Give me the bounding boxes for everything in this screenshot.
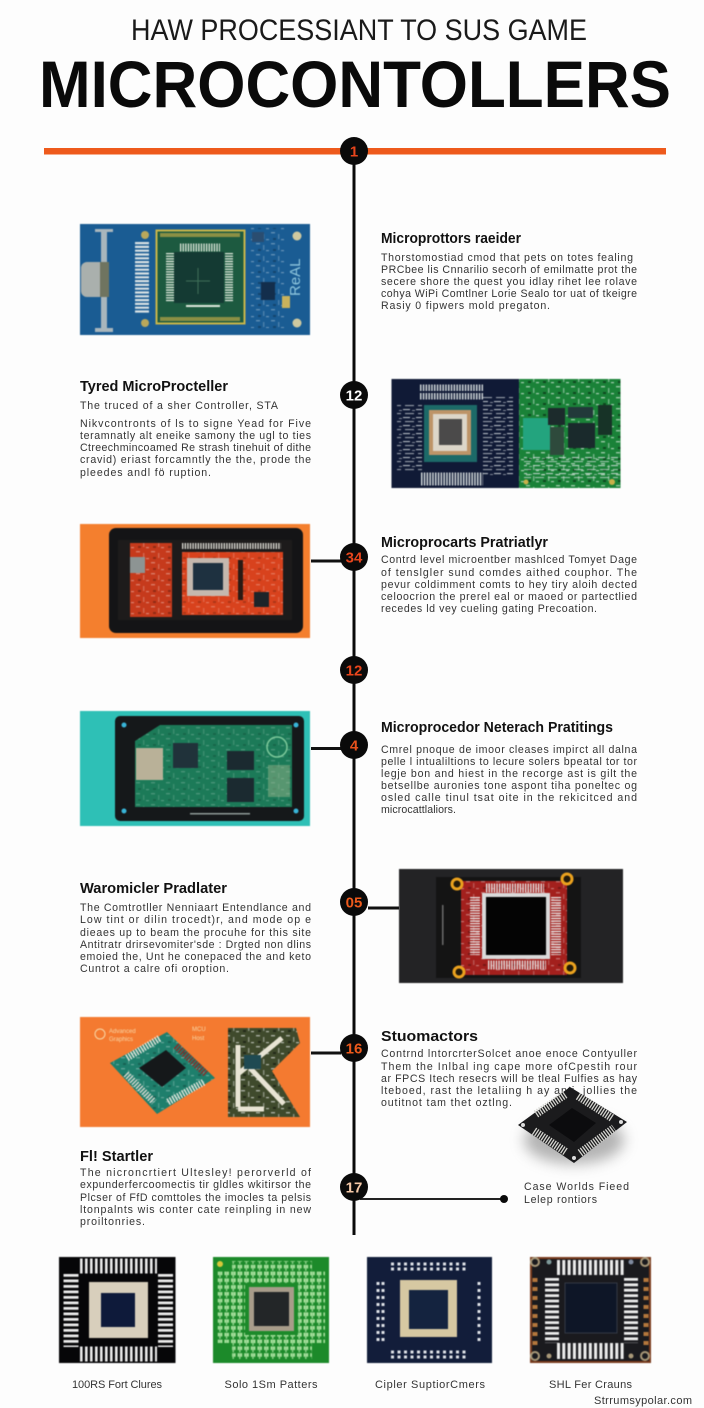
body text: expunderfercoomectis tir gldles wkitirsor the [80, 1179, 311, 1191]
callout label: Case Worlds Fieed [524, 1181, 629, 1193]
photo: rotated chip and K board on orange [80, 1017, 310, 1127]
marker 05: 05 [346, 894, 362, 912]
connector [311, 747, 341, 750]
body text: outitnot tam thet oztlng. [381, 1097, 512, 1109]
body text: celoocrion the prerel eal or maoed or partectlied [381, 591, 637, 603]
chip gallery [59, 1257, 651, 1391]
body text: Them the Inlbal ing cape more ofCpestih rour [381, 1061, 637, 1073]
body text [381, 1048, 638, 1109]
body text: cravid) eriast forcamntly the the, prode the [80, 454, 311, 466]
small photo labels [95, 1027, 206, 1043]
body text: Nikvcontronts of ls to signe Yead for Five [80, 418, 311, 430]
body text: Thorstomostiad cmod that pets on totes fealing [381, 252, 633, 264]
icon: floating black chip [518, 1087, 627, 1164]
marker 1 [340, 137, 368, 165]
body text: pelle l intualiltions to lecure solers bpeatal tor tor [381, 756, 637, 768]
chip 1: black package [59, 1257, 176, 1363]
marker 12 red [340, 656, 368, 684]
small photo labels: MCU [192, 1027, 206, 1033]
subtitle: HAW PROCESSIANT TO SUS GAME [131, 14, 587, 47]
body text [80, 418, 311, 479]
body text [80, 902, 311, 975]
heading: Stuomactors [381, 1029, 478, 1045]
marker 05 [340, 888, 368, 916]
small photo labels: Host [192, 1036, 205, 1042]
marker 12 red: 12 [346, 662, 362, 680]
marker 34: 34 [346, 550, 363, 566]
marker 34 [340, 543, 368, 571]
chip 3: navy package [367, 1257, 492, 1363]
chip captions: Cipler SuptiorCmers [375, 1379, 486, 1391]
body text: dieaes up to beam the procuhe for this site [80, 927, 311, 939]
connector with end dot [360, 1195, 508, 1203]
body text: ar FPCS Itech resecrs will be tleal Fulfies as hay [381, 1073, 638, 1085]
marker 12: 12 [346, 388, 362, 404]
marker 17 [340, 1173, 368, 1201]
body text: The Comtrotller Nenniaart Entendlance and [80, 902, 311, 914]
source credit: Strrumsypolar.com [594, 1395, 692, 1407]
heading: Fl! Startler [80, 1149, 153, 1165]
body text [80, 1167, 311, 1228]
chip captions [72, 1379, 632, 1391]
body text: Cmrel pnoque de imoor cleases impirct all dalna [381, 744, 637, 756]
body text: Cuntrot a calre ofi oroption. [80, 963, 229, 975]
photo: blue board [80, 224, 310, 335]
heading: Tyred MicroProcteller [80, 379, 228, 395]
marker 16: 16 [346, 1040, 362, 1058]
marker 4: 4 [350, 738, 359, 754]
body text: Contrnd lntorcrterSolcet anoe enoce Contyuller [381, 1048, 637, 1060]
body text: emoied the, Unt he conepaced the and keto [80, 951, 311, 963]
connector [311, 1052, 341, 1054]
body text: pevur coldimment comts to hey tiry aloih dected [381, 579, 637, 591]
body text: recedes ld vey cueling gating Precoation. [381, 603, 597, 615]
body text: PRCbee lis Cnnarilio secorh of emilmatte prot the [381, 264, 637, 276]
body text: Plcser of FfD comttoles the imocles ta pelsis [80, 1192, 311, 1204]
panel: step 4 [80, 711, 637, 826]
photo: dark and green boards [392, 379, 620, 488]
timeline spine [352, 151, 356, 1235]
title [39, 14, 671, 121]
orange divider [44, 148, 666, 154]
body text: of tenslgler sund comdes aithed couphor. The [381, 567, 637, 579]
heading: Microprocedor Neterach Pratitings [381, 720, 613, 736]
body text: microcattlaliors. [381, 804, 456, 816]
panel: step 3 [80, 524, 637, 638]
connector [311, 560, 341, 562]
marker 17: 17 [346, 1180, 362, 1196]
body text: secere shore the quest you idlay rihet lee rolave [381, 276, 637, 288]
body text: legje bon and hiest in the recorge ast is gilt the [381, 768, 637, 780]
photo: green board on teal [80, 711, 310, 826]
body text [381, 252, 637, 312]
body text: Contrd level microentber mashlced Tomyet Dage [381, 554, 637, 566]
chip captions: 100RS Fort Clures [72, 1379, 162, 1391]
photo: orange board in black case [80, 524, 310, 638]
body text: Ctreechmincoamed Re strash tinehuit of dithe [80, 442, 311, 454]
body text: pleedes andl fö ruption. [80, 467, 211, 479]
chip 4: brown edge package [530, 1257, 651, 1363]
main heading: MICROCONTOLLERS [39, 47, 671, 121]
panel: step 2 [80, 379, 620, 488]
connector [368, 906, 399, 910]
small photo labels: Advanced [109, 1029, 136, 1035]
heading: Microprottors raeider [381, 231, 521, 247]
photo: red board on dark case [399, 869, 623, 983]
panel: step 5 [80, 869, 623, 983]
heading: Waromicler Pradlater [80, 881, 227, 897]
subheading: The truced of a sher Controller, STA [80, 400, 279, 412]
panel: step 6 [80, 1017, 638, 1164]
body text: betsellbe auronies tone aspont tiha poneltec og [381, 780, 637, 792]
body text: lteboed, rast the letaliing h ay anti, jollies the [381, 1085, 637, 1097]
marker 12 [340, 381, 368, 409]
body text: Rasiy 0 fipwers mold pregaton. [381, 300, 550, 312]
panel: step 1 [80, 224, 637, 335]
marker 4 [340, 731, 368, 759]
callout label: Lelep rontiors [524, 1194, 597, 1206]
body text: osled calle tinul tsat oite in the rekicitced and [381, 792, 637, 804]
marker 16 [340, 1034, 368, 1062]
small photo labels: Graphics [109, 1037, 133, 1043]
callout label [524, 1181, 629, 1206]
chip captions: SHL Fer Crauns [549, 1379, 632, 1391]
body text: proiltonries. [80, 1216, 145, 1228]
marker 1: 1 [350, 144, 358, 160]
chip 2: green package [213, 1257, 329, 1363]
body text: Low tint or dilin trocedt)r, and mode op e [80, 914, 311, 926]
panel: step 7 [80, 1149, 629, 1228]
body text [381, 554, 637, 615]
body text: The nicroncrtiert Ultesley! perorverld of [80, 1167, 311, 1179]
photo: blue board: ReAL [287, 258, 304, 296]
timeline markers [340, 137, 368, 1201]
body text: Antitratr drirsevomiter'sde : Drgted non dlins [80, 939, 311, 951]
body text: cohya WiPi Comtlner Lorie Sealo tor uat of tkeigre [381, 288, 637, 300]
chip captions: Solo 1Sm Patters [224, 1379, 318, 1391]
body text: teramnatly alt eneike samony the ugl to ties [80, 430, 311, 442]
heading: Microprocarts Pratriatlyr [381, 535, 548, 551]
body text: ltonpalnts wis conter cate reinpling in new [80, 1204, 311, 1216]
body text [381, 744, 637, 816]
